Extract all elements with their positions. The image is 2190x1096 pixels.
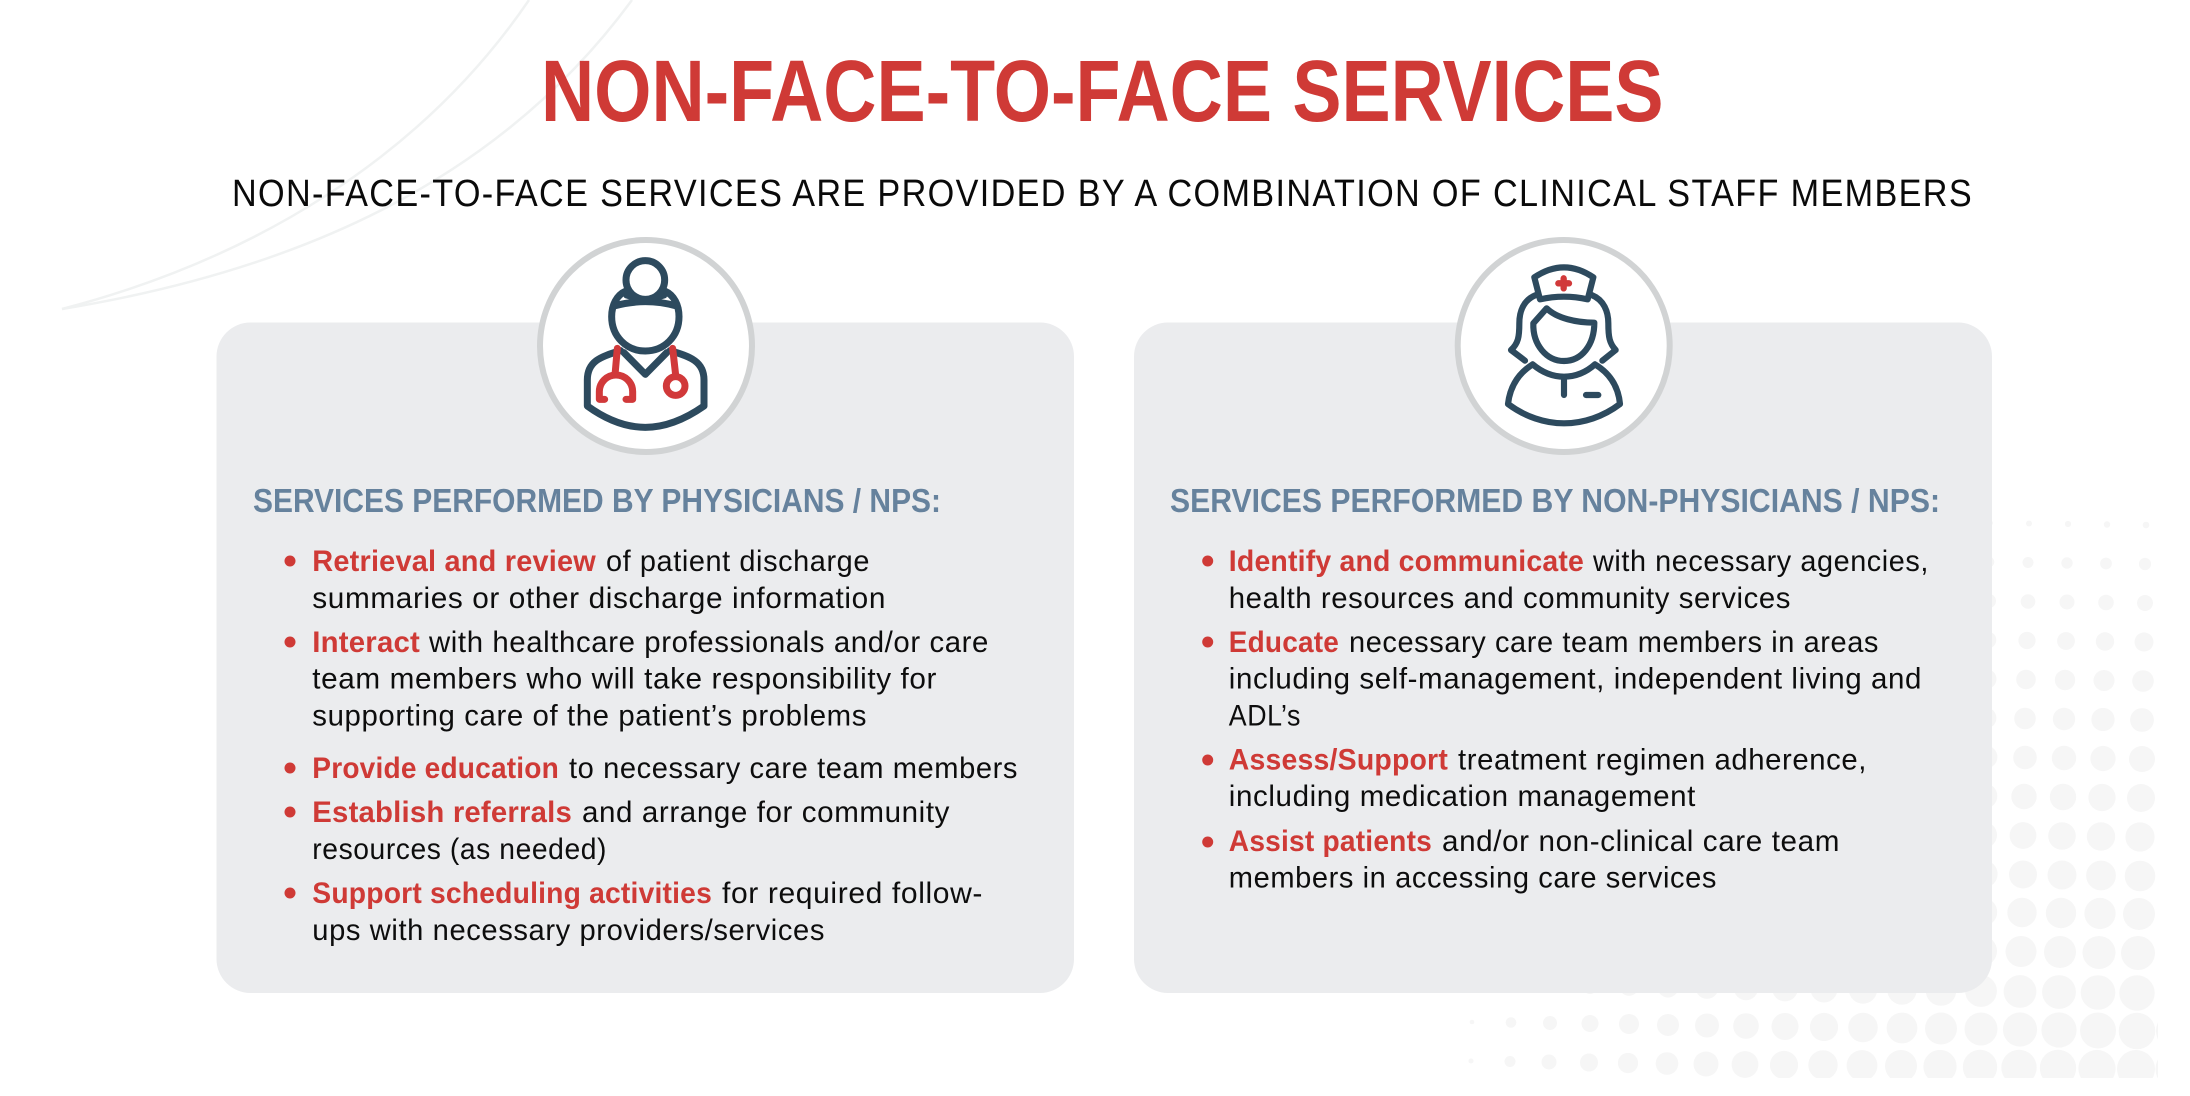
bullet: educate: including self-management, independent living and [1229, 662, 1922, 696]
bullet: assess/support: including medication management [1229, 780, 1696, 813]
bullet: educate: ADL’s [1229, 700, 1301, 732]
bullet: retrieval and review [284, 545, 886, 615]
icon: nurse with cap [1458, 240, 1670, 452]
bullet: establish referrals [284, 796, 950, 866]
bullet: educate: Educate [1229, 626, 1339, 659]
bullet: interact [284, 626, 989, 732]
bullet: provide education: to necessary care team members [569, 752, 1018, 785]
bullet: assist patients [1202, 825, 1840, 894]
panel background [1134, 322, 1992, 993]
bullet: assess/support: treatment regimen adherence, [1458, 744, 1867, 776]
bullet: interact: team members who will take responsibility for [312, 662, 937, 696]
bullet: identify and communicate: Identify and communicate [1229, 545, 1584, 578]
bullet: establish referrals: and arrange for community [582, 796, 950, 829]
bullet: educate: necessary care team members in areas [1349, 626, 1879, 659]
bullet: retrieval and review: of patient discharge [606, 545, 870, 578]
icon: physician with stethoscope [540, 240, 752, 452]
bullet: assist patients: and/or non-clinical care team [1442, 825, 1840, 858]
bullet: provide education [284, 752, 1018, 785]
bullet: support scheduling activities [284, 877, 983, 947]
bullet: identify and communicate: with necessary agencies, [1592, 545, 1929, 578]
panel background [216, 322, 1074, 993]
bullet: interact: supporting care of the patient’s problems [312, 700, 867, 732]
bullet: assist patients: Assist patients [1229, 825, 1432, 858]
bullet: interact: Interact [312, 626, 420, 659]
bullet: educate [1202, 626, 1922, 732]
bullet: retrieval and review: Retrieval and review [312, 545, 596, 578]
panel heading: SERVICES PERFORMED BY NON-PHYSICIANS / NPS: [1170, 482, 1940, 519]
panel heading: SERVICES PERFORMED BY PHYSICIANS / NPS: [253, 482, 941, 519]
bullet: provide education: Provide education [312, 752, 559, 785]
bullet: assess/support [1202, 744, 1867, 813]
bullet: support scheduling activities: for required follow- [722, 877, 983, 910]
bullet: identify and communicate: health resources and community services [1229, 582, 1791, 615]
bullet: interact: with healthcare professionals and/or care [428, 626, 989, 659]
panel: services performed by physicians [216, 240, 1074, 993]
bullet: identify and communicate [1202, 545, 1929, 615]
subtitle: NON-FACE-TO-FACE SERVICES ARE PROVIDED BY A COMBINATION OF CLINICAL STAFF MEMBERS [232, 173, 1973, 215]
bullet: support scheduling activities: Support scheduling activities [312, 877, 712, 910]
bullet: support scheduling activities: ups with necessary providers/services [312, 914, 825, 947]
bullet: assess/support: Assess/Support [1229, 744, 1448, 776]
bullet: establish referrals: Establish referrals [312, 796, 572, 829]
bullet: retrieval and review: summaries or other discharge information [312, 582, 886, 615]
bullet: assist patients: members in accessing care services [1229, 862, 1717, 894]
bullet: establish referrals: resources (as needed) [312, 833, 607, 866]
title: NON-FACE-TO-FACE SERVICES [541, 43, 1664, 140]
panel: services performed by non-physicians [1134, 240, 1992, 993]
